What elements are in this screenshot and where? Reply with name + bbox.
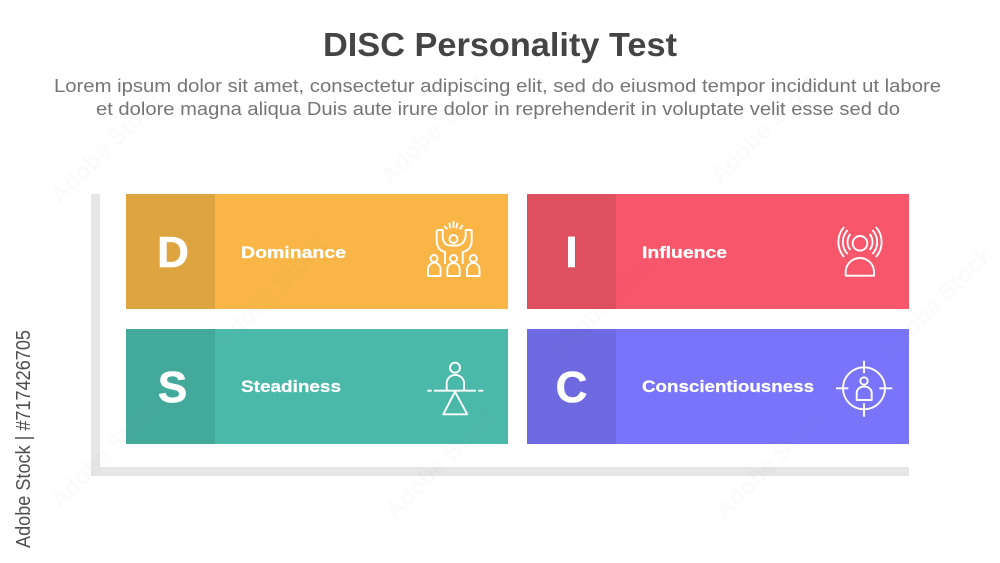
watermark text <box>45 66 998 524</box>
watermark text: Adobe Stock <box>375 66 498 189</box>
vertical stock credit: Adobe Stock | #717426705 <box>13 330 35 548</box>
icon: crowd with raised arms <box>428 221 480 276</box>
panel: influence <box>527 194 909 309</box>
watermark text: Adobe Stock <box>545 241 668 364</box>
subtitle text block <box>54 76 941 119</box>
watermark text: Adobe Stock <box>45 86 168 209</box>
subtitle text block: Lorem ipsum dolor sit amet, consectetur adipiscing elit, sed do eiusmod tempor incididunt ut labore <box>54 76 941 96</box>
watermark text: Adobe Stock <box>210 231 333 354</box>
watermark text: Adobe Stock <box>875 241 998 364</box>
panel: conscientiousness: Conscientiousness <box>642 377 814 396</box>
panel: steadiness <box>126 329 508 444</box>
title: DISC Personality Test <box>323 26 677 63</box>
L-shaped axis frame <box>91 194 909 476</box>
panel: conscientiousness <box>527 329 909 444</box>
panel: steadiness: Steadiness <box>241 377 341 396</box>
icon: target on person <box>836 361 892 417</box>
panel: influence: Influence <box>642 243 727 262</box>
panel: dominance: Dominance <box>241 243 346 262</box>
panel: steadiness: S <box>158 363 187 412</box>
panel: influence: I <box>565 228 578 277</box>
watermark text: Adobe Stock <box>705 66 828 189</box>
panel: conscientiousness: C <box>556 363 587 412</box>
panel: dominance <box>126 194 508 309</box>
watermark text: Adobe Stock <box>380 401 503 524</box>
icon: broadcasting person <box>838 227 882 276</box>
panel: dominance: D <box>157 228 189 277</box>
subtitle text block: et dolore magna aliqua Duis aute irure dolor in reprehenderit in voluptate velit esse sed do <box>96 99 900 119</box>
watermark text: Adobe Stock <box>710 401 833 524</box>
icon: balanced person <box>427 363 483 414</box>
watermark text: Adobe Stock <box>45 391 168 514</box>
